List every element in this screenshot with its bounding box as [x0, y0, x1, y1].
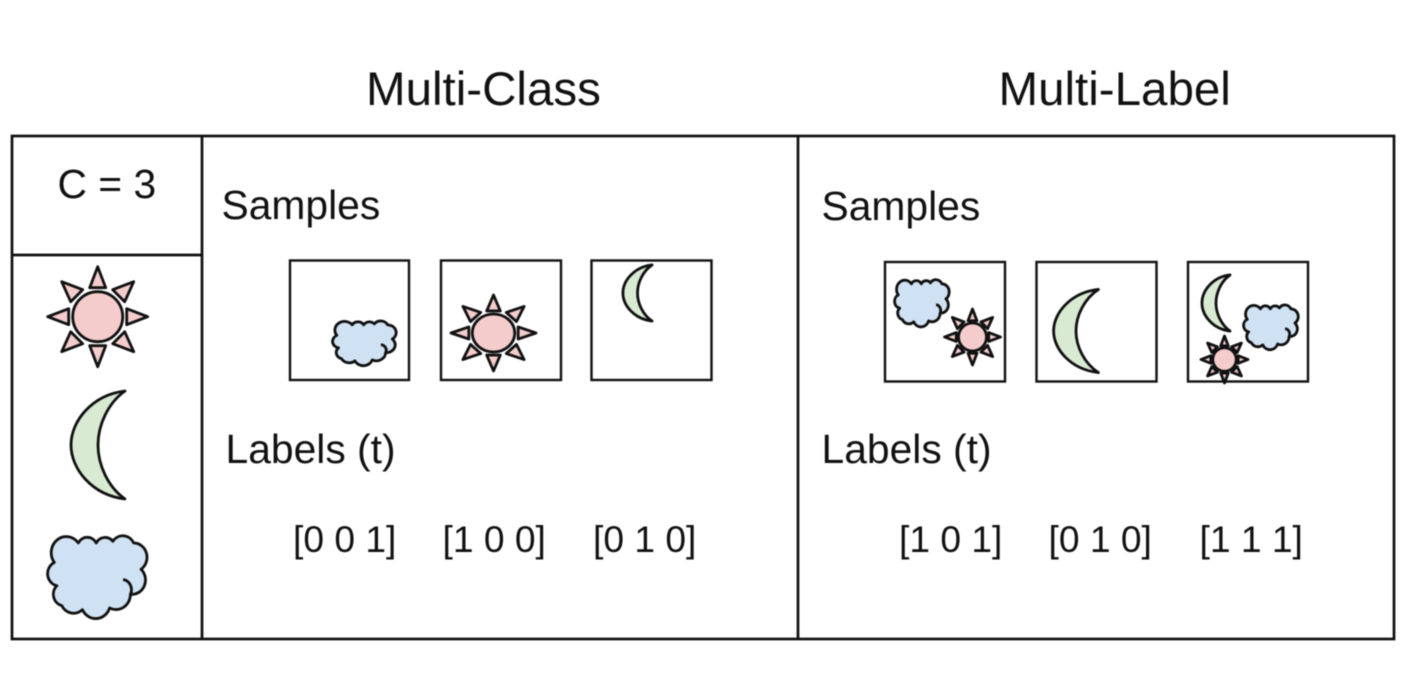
text: C = 3: C = 3	[58, 161, 156, 207]
label vectors	[899, 518, 1303, 560]
label vectors: [0 1 0]	[1048, 518, 1152, 560]
label vectors: [1 0 0]	[442, 518, 546, 560]
panel: multi-label	[822, 183, 1308, 560]
text: labels heading: Labels (t)	[822, 426, 992, 472]
label vectors: [0 0 1]	[293, 518, 396, 560]
sample 3: moon, cloud and sun	[1188, 262, 1308, 383]
text: labels heading: Labels (t)	[226, 426, 396, 472]
text: samples heading: Samples	[222, 182, 380, 228]
label vectors: [1 1 1]	[1200, 518, 1303, 560]
panel: outer table frame	[12, 136, 1394, 639]
sample 1: cloud	[290, 260, 409, 380]
icon: sun	[48, 267, 148, 367]
label vectors: [1 0 1]	[899, 518, 1002, 560]
label vectors	[293, 518, 696, 560]
panel: multi-class	[222, 182, 712, 560]
label vectors: [0 1 0]	[593, 518, 696, 560]
icon: moon	[71, 391, 125, 499]
sample 3: moon	[592, 260, 712, 380]
icon: cloud	[48, 536, 147, 619]
sample 1: cloud and sun	[885, 262, 1005, 382]
heading: Multi-Label: Multi-Label	[998, 63, 1231, 116]
sample 2: moon	[1036, 262, 1156, 382]
text: samples heading: Samples	[822, 183, 980, 229]
panel: class legend	[48, 161, 156, 619]
sample 2: sun	[441, 260, 561, 380]
heading: Multi-Class: Multi-Class	[366, 63, 601, 116]
